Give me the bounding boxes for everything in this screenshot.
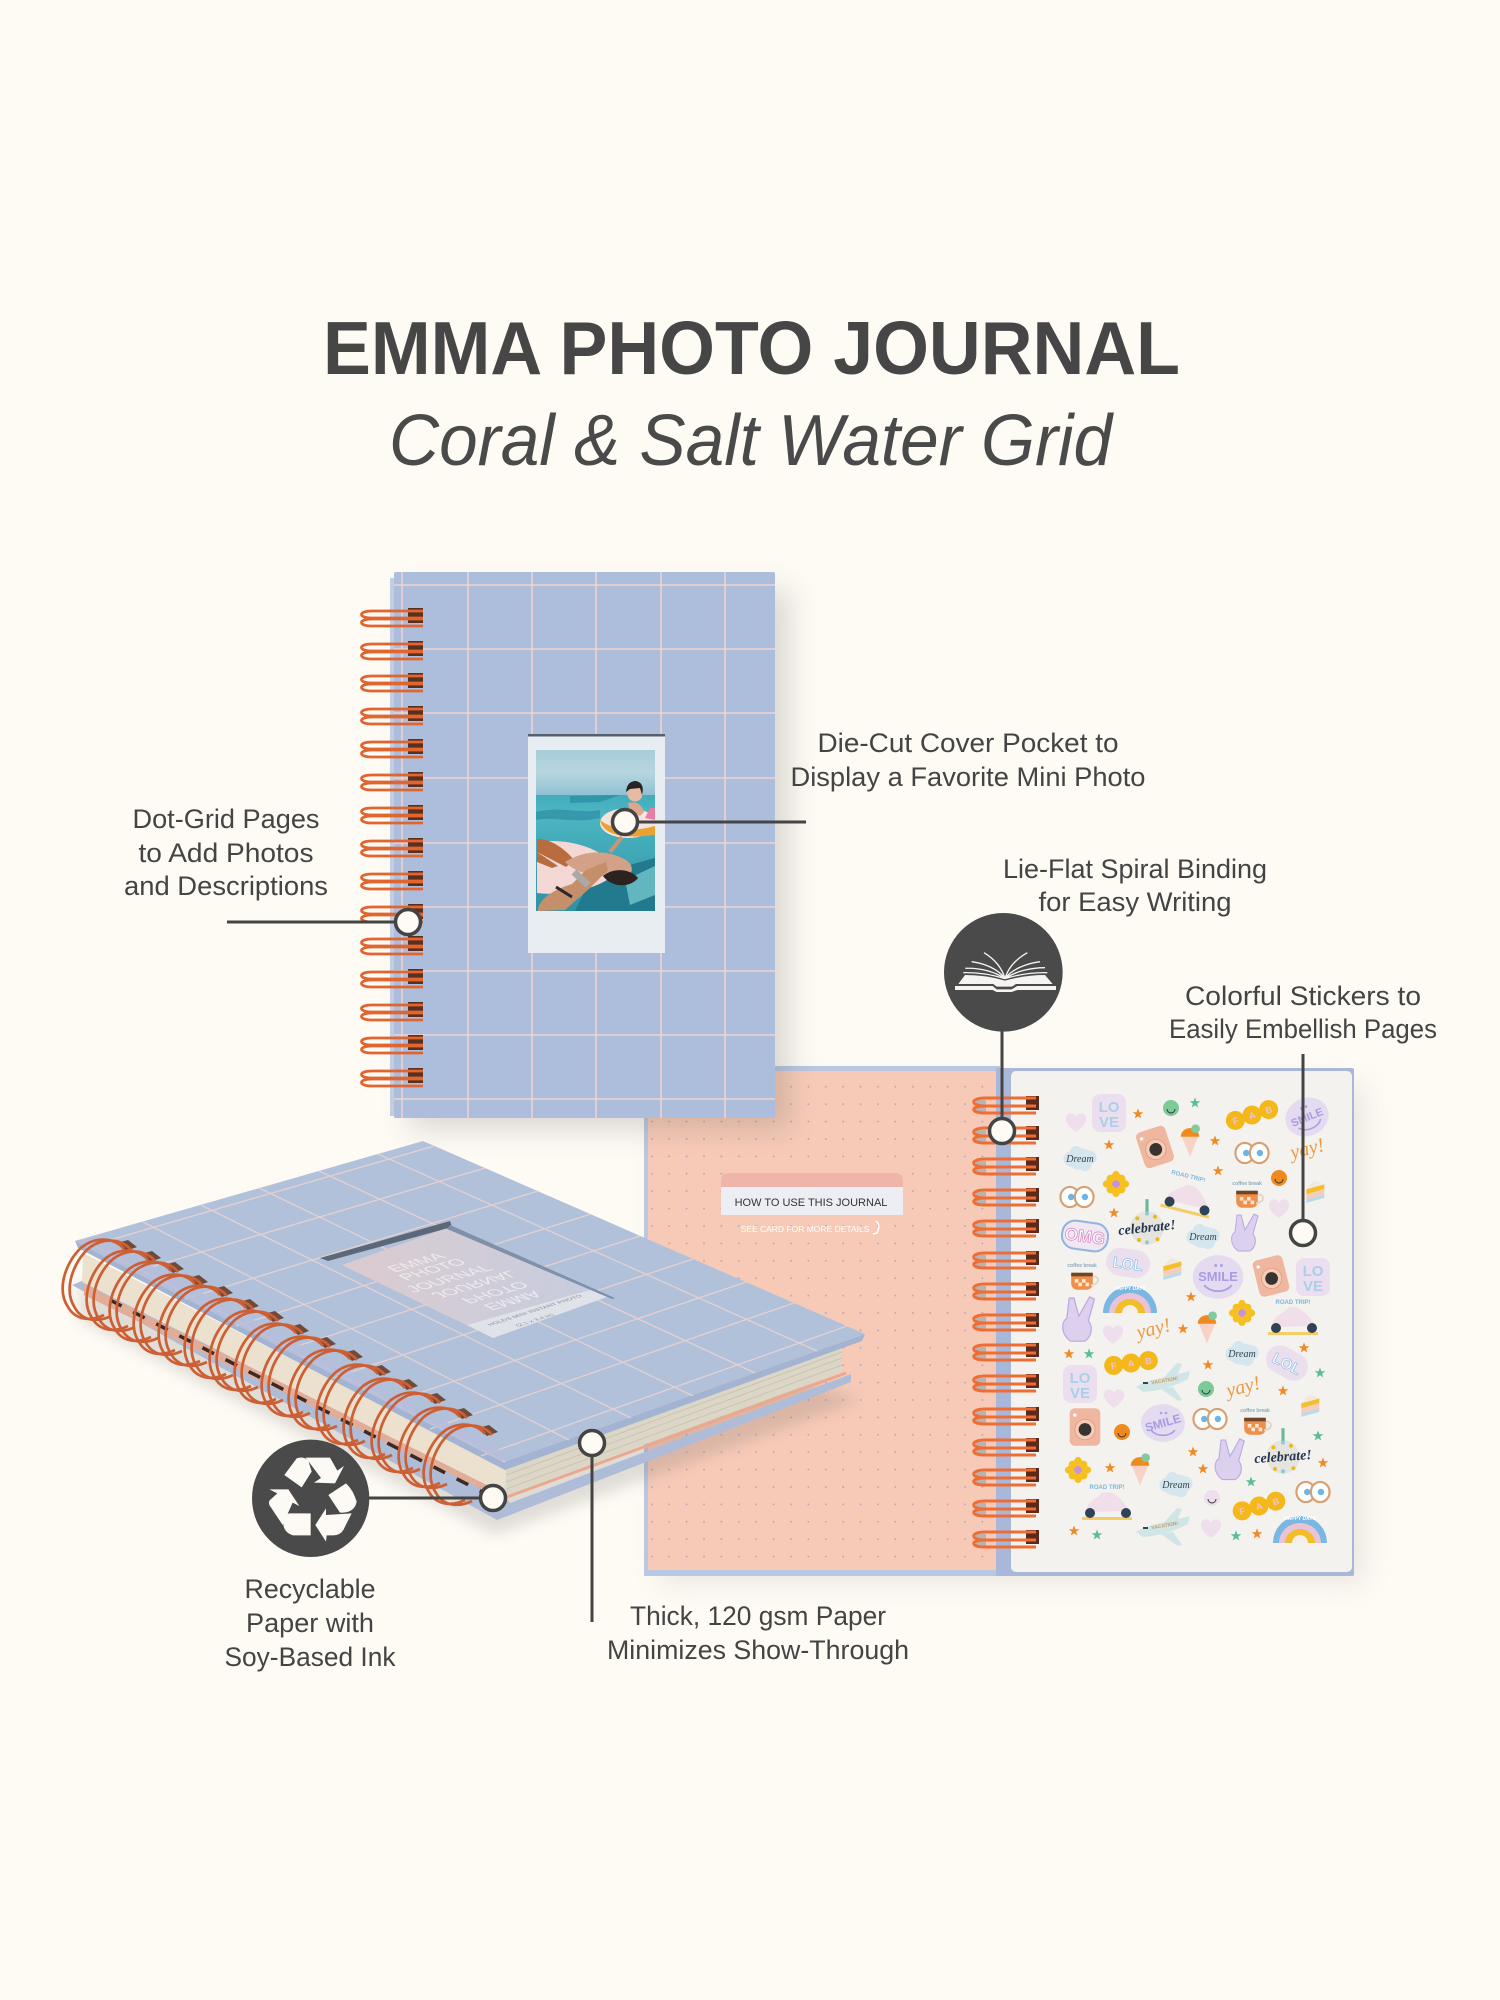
sticker sheet: yay! (1132, 1314, 1173, 1344)
label: spiral binding (1003, 854, 1267, 917)
sticker sheet: LO (1070, 1370, 1091, 1387)
sticker sheet: VE (1099, 1114, 1119, 1131)
label: dot grid: and Descriptions (124, 871, 328, 901)
perspective closed journal (63, 1141, 865, 1535)
back cover (72, 1280, 851, 1520)
spiral binding (362, 608, 423, 1086)
pocket window with card: EMMA (479, 1288, 547, 1312)
sticker: FAB: F (1231, 1115, 1240, 1126)
pocket window with card (320, 1221, 615, 1338)
sticker sheet: yay! (1286, 1134, 1327, 1164)
sticker sheet: coffee break (1240, 1408, 1270, 1414)
label: dot grid: Dot-Grid Pages (132, 804, 320, 834)
pocket window with card: PHOTO (394, 1257, 471, 1283)
sticker sheet: B (1271, 1496, 1281, 1507)
sticker sheet: ROAD TRIP! (1171, 1170, 1206, 1184)
label: recyclable: Recyclable (244, 1574, 376, 1604)
callout: spiral binding with book icon (944, 913, 1063, 1144)
instant photo in cover pocket (528, 734, 665, 953)
sticker sheet: yay! (1222, 1372, 1263, 1402)
sticker sheet: Dream (1065, 1154, 1094, 1165)
sticker sheet: A (1255, 1501, 1264, 1512)
pocket window with card: JOURNAL (401, 1263, 498, 1294)
how to use card pocket (721, 1173, 903, 1234)
sticker sheet: SMILE (1198, 1269, 1238, 1284)
label: spiral binding: for Easy Writing (1038, 887, 1232, 917)
callout: thick paper (580, 1430, 604, 1622)
sticker sheet: F (1110, 1361, 1118, 1371)
sticker sheet: SMILE (1143, 1411, 1183, 1435)
label: stickers: Easily Embellish Pages (1169, 1014, 1437, 1044)
label: stickers: Colorful Stickers to (1185, 981, 1421, 1011)
sticker sheet: OMG (1064, 1224, 1106, 1249)
pink float and woman (537, 841, 607, 894)
peach liner with binding gaps (84, 1284, 510, 1503)
sticker sheet: Dream (1227, 1349, 1256, 1360)
sticker: FAB (1223, 1098, 1281, 1132)
sticker sheet: VE (1303, 1278, 1323, 1295)
sticker: FAB: B (1264, 1104, 1274, 1116)
girl on ring (628, 802, 644, 816)
callout: stickers (1290, 1054, 1316, 1246)
label: recyclable: Soy-Based Ink (224, 1642, 396, 1672)
how to use card pocket: SEE CARD FOR MORE DETAILS (741, 1224, 870, 1234)
open journal spiral binding (974, 1096, 1039, 1547)
label: thick paper (607, 1601, 909, 1665)
sticker: FAB: A (1248, 1110, 1257, 1121)
sticker sheet: coffee break (1067, 1263, 1097, 1269)
sticker sheet: LOL (1269, 1350, 1304, 1379)
how to use card pocket: HOW TO USE THIS JOURNAL (735, 1197, 887, 1209)
callout: photo pocket (612, 810, 806, 834)
closed journal front view (362, 572, 790, 1130)
label: dot grid (124, 804, 328, 901)
pocket window with card: (2.1 x 3.4 in) (514, 1313, 556, 1328)
sticker sheet: VACATION! (1151, 1376, 1179, 1386)
icon: open book (944, 913, 1063, 1032)
right inner cover and sticker page (996, 1068, 1354, 1576)
label: recyclable (224, 1574, 396, 1672)
cover with grid (394, 572, 775, 1118)
sticker sheet: ROAD TRIP! (1090, 1485, 1124, 1491)
pocket window with card: PHOTO (456, 1279, 533, 1305)
sticker sheet: celebrate! (1118, 1218, 1176, 1239)
sticker sheet: HAPPY DAYS (1114, 1286, 1147, 1292)
page block fore edge (505, 1345, 846, 1497)
sticker sheet: B (1144, 1356, 1153, 1366)
sticker sheet: coffee break (1232, 1181, 1262, 1187)
title: EMMA PHOTO JOURNAL (323, 306, 1180, 390)
label: recyclable: Paper with (246, 1608, 374, 1638)
cover thickness (75, 1241, 865, 1470)
label: dot grid: to Add Photos (138, 838, 314, 868)
sticker sheet: LO (1303, 1263, 1324, 1280)
ring float (600, 808, 656, 838)
label: die-cut pocket: Display a Favorite Mini Photo (790, 762, 1146, 792)
sticker sheet: F (1238, 1506, 1247, 1517)
sticker sheet: LOL (1112, 1254, 1144, 1275)
label: thick paper: Minimizes Show-Through (607, 1635, 909, 1665)
sticker sheet: celebrate! (1254, 1448, 1312, 1467)
sticker sheet: SMILE (1290, 1106, 1325, 1130)
page block spine side (82, 1253, 505, 1493)
label: thick paper: Thick, 120 gsm Paper (630, 1601, 886, 1631)
sticker sheet (1060, 1091, 1335, 1546)
sticker sheet: Dream (1188, 1232, 1217, 1243)
label: spiral binding: Lie-Flat Spiral Binding (1003, 854, 1267, 884)
sticker sheet: A (1127, 1358, 1135, 1369)
left inner cover and dot grid page (644, 1066, 1000, 1576)
pocket window with card: EMMA (383, 1251, 451, 1274)
sticker sheet: HAPPY DAYS (1284, 1516, 1317, 1522)
label: die-cut pocket: Die-Cut Cover Pocket to (818, 728, 1118, 758)
sticker sheet: Dream (1161, 1480, 1190, 1491)
spiral coils (63, 1240, 498, 1505)
icon: recycle (252, 1440, 369, 1557)
label: stickers (1169, 981, 1437, 1044)
open journal with sticker sheet (644, 1066, 1364, 1583)
label: die-cut pocket (790, 728, 1146, 792)
sticker sheet: VACATION! (1151, 1521, 1179, 1531)
subtitle: Coral & Salt Water Grid (389, 401, 1114, 481)
callout: dot grid (227, 910, 420, 934)
sticker sheet: ROAD TRIP! (1276, 1300, 1310, 1306)
sticker sheet: LO (1099, 1099, 1120, 1116)
pocket window with card: JOURNAL (426, 1269, 523, 1300)
pocket window with card: HOLDS MINI INSTANT PHOTO (486, 1294, 584, 1327)
sticker sheet: VE (1070, 1385, 1090, 1402)
callout: recyclable with icon (252, 1440, 506, 1557)
cover top with grid (75, 1141, 865, 1462)
